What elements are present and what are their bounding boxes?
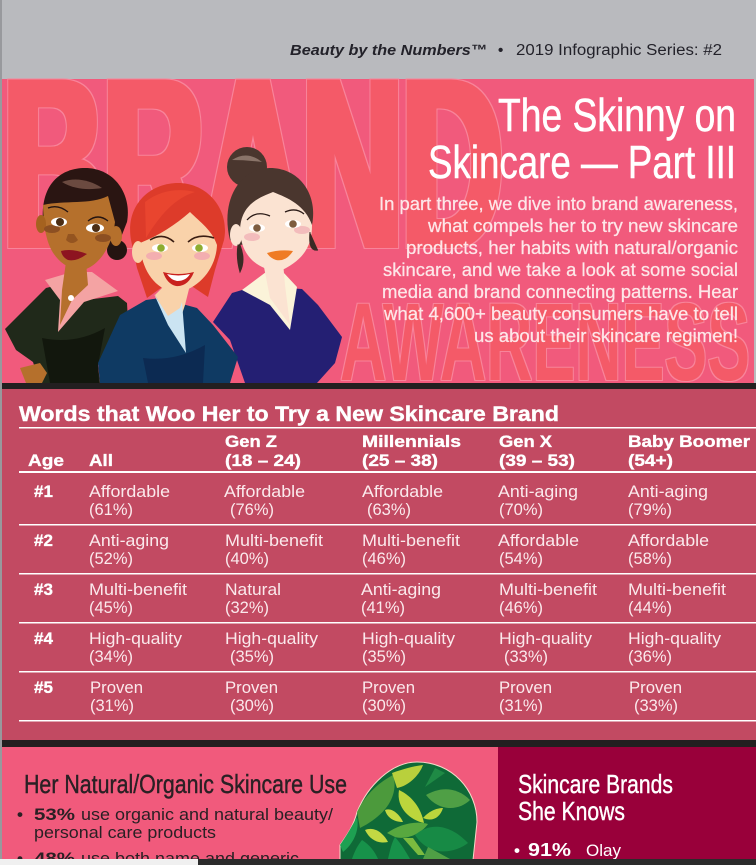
row 3 (34, 580, 726, 617)
hero intro text: skincare, and we take a look at some social (383, 260, 738, 280)
row 2: Affordable (498, 532, 579, 550)
hero intro text: media and brand connecting patterns. Hear (382, 282, 738, 302)
section heading (518, 769, 673, 826)
row 4 (34, 629, 722, 666)
table header row: Gen X (499, 432, 553, 451)
series header: • (498, 42, 503, 59)
row 4: (35%) (230, 648, 274, 666)
series header (290, 42, 722, 59)
icon: leaf head (340, 762, 477, 860)
hero intro text: products, her habits with natural/organic (406, 238, 738, 258)
row 2 (34, 531, 709, 568)
bullet: 91% Olay: • (514, 841, 520, 860)
row 4: (35%) (362, 648, 406, 666)
row 2: (40%) (225, 550, 269, 568)
hero intro text: us about their skincare regimen! (474, 326, 738, 346)
table header row (28, 432, 750, 470)
table heading: Words that Woo Her to Try a New Skincare Brand (19, 403, 559, 426)
table header row: (54+) (628, 451, 673, 470)
bullet: 53%: • (17, 805, 23, 824)
table header row: All (89, 451, 113, 470)
hero intro text: In part three, we dive into brand awareness, (379, 194, 738, 214)
panel: brands she knows (498, 747, 756, 860)
series header: Beauty by the Numbers™ (290, 42, 487, 59)
row 4: (33%) (504, 648, 548, 666)
row 2: (46%) (362, 550, 406, 568)
row 5 (34, 678, 682, 715)
hero intro text: what 4,600+ beauty consumers have to tell (383, 304, 738, 324)
row 4: #4 (34, 629, 53, 648)
row 2: (58%) (628, 550, 672, 568)
row 5: (30%) (230, 697, 274, 715)
row 1: (63%) (367, 501, 411, 519)
bullet: 53%: use organic and natural beauty/ (81, 805, 333, 824)
row 2: #2 (34, 531, 53, 550)
row 2: Affordable (628, 532, 709, 550)
row 4: High-quality (499, 630, 593, 648)
row 3: (41%) (361, 599, 405, 617)
row 4: High-quality (362, 630, 456, 648)
row 1: (76%) (230, 501, 274, 519)
row 3: (44%) (628, 599, 672, 617)
bullet: 91% Olay: 91% (528, 840, 571, 860)
table header row: Baby Boomer (628, 432, 750, 451)
row 2: Multi-benefit (225, 532, 323, 550)
panel: hero (2, 29, 754, 404)
hero title (428, 89, 736, 188)
row 1: Anti-aging (498, 483, 578, 501)
section heading: Skincare Brands (518, 769, 673, 799)
row 4: High-quality (628, 630, 722, 648)
panel: words table (2, 389, 756, 740)
row 4: High-quality (89, 630, 183, 648)
row 3: Multi-benefit (499, 581, 597, 599)
hero intro text: what compels her to try new skincare (427, 216, 738, 236)
bullet: 91% Olay (514, 840, 621, 860)
row 1: #1 (34, 482, 53, 501)
bullet: 91% Olay: Olay (586, 841, 621, 860)
table header row: Gen Z (225, 432, 277, 451)
table header row: Millennials (362, 432, 461, 451)
row 1: Anti-aging (628, 483, 708, 501)
row 1: (61%) (89, 501, 133, 519)
row 1: Affordable (362, 483, 443, 501)
woman centre (98, 183, 238, 383)
row 2: (52%) (89, 550, 133, 568)
row 3: Anti-aging (361, 581, 441, 599)
row 1 (34, 482, 708, 519)
row 2: Anti-aging (89, 532, 169, 550)
row 5: #5 (34, 678, 53, 697)
panel: natural organic use (2, 747, 498, 865)
bullet: 53%: 53% (34, 805, 75, 824)
section heading: She Knows (518, 796, 625, 826)
row 3: (46%) (499, 599, 543, 617)
row 4: High-quality (225, 630, 319, 648)
row 4: (34%) (89, 648, 133, 666)
row 1: (79%) (628, 501, 672, 519)
row 5: (30%) (362, 697, 406, 715)
row 3: #3 (34, 580, 53, 599)
row 5: Proven (225, 679, 278, 697)
hero intro text (379, 194, 738, 346)
row 5: (31%) (499, 697, 543, 715)
series header: 2019 Infographic Series: #2 (516, 42, 722, 59)
row 3: Natural (225, 581, 281, 599)
row 5: (33%) (634, 697, 678, 715)
row 3: (45%) (89, 599, 133, 617)
row 3: Multi-benefit (628, 581, 726, 599)
woman right (213, 147, 342, 383)
bullet: 53%: personal care products (34, 823, 216, 842)
row 5: Proven (499, 679, 552, 697)
row 1: (70%) (499, 501, 543, 519)
row 2: (54%) (499, 550, 543, 568)
row 5: Proven (362, 679, 415, 697)
table header row: Age (28, 451, 64, 470)
row 3: Multi-benefit (89, 581, 187, 599)
row 4: (36%) (628, 648, 672, 666)
row 3: (32%) (225, 599, 269, 617)
row 1: Affordable (224, 483, 305, 501)
section heading: Her Natural/Organic Skincare Use (24, 769, 347, 799)
row 5: (31%) (90, 697, 134, 715)
table header row: (39 – 53) (499, 451, 575, 470)
row 2: Multi-benefit (362, 532, 460, 550)
row 5: Proven (90, 679, 143, 697)
table header row: (25 – 38) (362, 451, 438, 470)
woman left (5, 168, 128, 383)
illustration: three women (5, 147, 342, 383)
table header row: (18 – 24) (225, 451, 301, 470)
bullet: 53% (17, 805, 333, 842)
row 5: Proven (629, 679, 682, 697)
row 1: Affordable (89, 483, 170, 501)
